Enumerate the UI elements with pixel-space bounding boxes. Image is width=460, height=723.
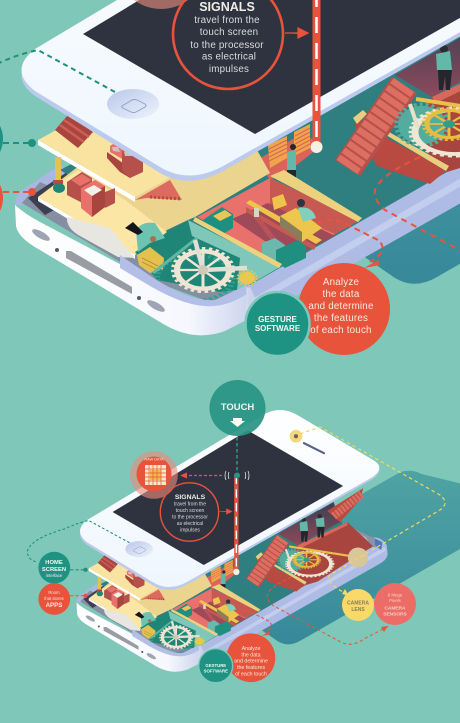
upper gesture text: SOFTWARE [255, 324, 301, 333]
yellow crate [137, 247, 164, 273]
home screen label: HOME [45, 560, 63, 566]
raw data arrow [180, 472, 222, 478]
foreground gear [153, 238, 247, 301]
camera lens arrow [342, 589, 349, 596]
body front wall [15, 205, 262, 335]
dark gear housing [135, 220, 240, 292]
small stairs [135, 180, 182, 200]
red room [197, 170, 362, 265]
apps label: that stores [44, 596, 64, 601]
home screen circle [0, 109, 3, 169]
analyze label: the features [237, 665, 265, 671]
camera sensors label: Pixels [389, 598, 402, 603]
analyze label: and determine [234, 658, 268, 664]
machine [254, 208, 306, 268]
apps circle [0, 168, 3, 228]
phone top thickness [22, 0, 460, 181]
dark cavity corner [28, 170, 90, 215]
home screen label: SCREEN [42, 567, 66, 573]
apps connector [3, 188, 36, 196]
teal gear [396, 104, 448, 146]
raw data halo [116, 0, 206, 9]
touch dashes [236, 437, 238, 472]
gesture circle [246, 292, 310, 356]
upper signals description: to the processor [190, 40, 264, 51]
camera sensors circle [374, 583, 416, 625]
rim highlight [250, 100, 460, 301]
gold support pole [53, 157, 65, 193]
lower signals description: travel from the [174, 502, 206, 508]
yellow bar [416, 99, 460, 119]
raw data panel [136, 456, 172, 492]
right speaker [146, 298, 166, 314]
raw data pixel grid [145, 465, 166, 485]
analyze label: the data [241, 652, 261, 658]
home screen label: interface [46, 573, 63, 578]
right screw [137, 296, 141, 300]
mechanic [125, 222, 165, 252]
gesture label: GESTURE [205, 663, 226, 668]
yellow camera link [300, 427, 445, 593]
upper signals description: impulses [209, 64, 249, 75]
camera sensors label: 8 Mega [388, 592, 403, 598]
main staircase [335, 77, 417, 176]
upper analyze text: the features [314, 313, 368, 324]
lower signals text: SIGNALS [175, 494, 206, 501]
touch label: TOUCH [221, 402, 254, 413]
room edge [193, 217, 282, 268]
lower signals description: to the processor [172, 514, 208, 520]
camera lens label: LENS [351, 607, 365, 613]
upper cabinets [107, 142, 143, 178]
lower yellow floor [38, 170, 167, 259]
touch arrow [230, 418, 245, 427]
dock connector [66, 251, 132, 294]
cream gear [411, 108, 460, 156]
left speaker [31, 227, 51, 243]
vibration waves [225, 471, 249, 480]
upper analyze text: and determine [308, 301, 374, 312]
yellow gear [423, 108, 460, 140]
red platform [353, 110, 449, 184]
upper signals text: SIGNALS [199, 0, 255, 14]
analysis link [317, 220, 382, 262]
analysis arrow [364, 260, 380, 268]
analyze label: of each touch [235, 672, 267, 678]
signal pole [310, 0, 322, 153]
upper gesture text: GESTURE [258, 315, 298, 324]
red stairs on upper floor [55, 115, 93, 148]
touch circle [210, 380, 266, 436]
arrow to pole [285, 28, 308, 38]
upper signals description: touch screen [200, 27, 258, 38]
main yellow floor [38, 150, 270, 255]
room ledge [432, 53, 460, 103]
raw data label: RAW DATA [144, 458, 164, 462]
lower cabinets [67, 172, 115, 217]
upper analyze text: of each touch [310, 325, 372, 336]
lower phone illustration [27, 410, 460, 683]
battery [67, 217, 135, 258]
apps label: APPS [46, 602, 62, 609]
body side rim [238, 82, 460, 324]
seated worker [297, 199, 316, 222]
camera sensor link [375, 157, 460, 284]
upper yellow floor [38, 118, 180, 202]
camera sensors label: SENSORS [383, 612, 408, 618]
phone white face [22, 0, 460, 176]
camera lens label: CAMERA [347, 600, 369, 606]
upper analyze text: the data [322, 289, 360, 300]
lower signals description: impulses [180, 528, 200, 534]
left screw [55, 248, 59, 252]
phone shadow [340, 0, 460, 284]
camera sensors label: CAMERA [384, 606, 406, 612]
gear room floor [155, 220, 280, 292]
gesture label: SOFTWARE [204, 668, 228, 674]
camera lens circle [342, 589, 374, 621]
analyze label: Analyze [242, 646, 260, 652]
back room wall [395, 15, 460, 97]
apps label: Room [48, 590, 60, 595]
worker [287, 144, 296, 180]
sensor dot [234, 472, 240, 478]
rim seam [246, 287, 248, 318]
upper phone illustration [0, 0, 460, 356]
gear arm [410, 104, 418, 128]
home button [107, 89, 159, 119]
upper analyze text: Analyze [323, 277, 359, 288]
upper signals description: as electrical [202, 52, 256, 62]
front lavender edge [120, 255, 247, 306]
teal crates [203, 207, 233, 238]
person [436, 45, 452, 90]
lower signals description: touch screen [176, 508, 205, 514]
home screen link [0, 50, 115, 128]
upper signals description: travel from the [194, 15, 260, 26]
screen [83, 0, 460, 134]
desk with yellow boxes [246, 194, 322, 250]
analyze circle [298, 263, 390, 355]
back left rim [15, 165, 70, 205]
centre wall with striped panels [257, 124, 316, 180]
interior cavity [22, 182, 250, 304]
small gold gear [238, 270, 256, 286]
back red floor [405, 53, 460, 172]
camera sensors arrow [381, 626, 388, 632]
home screen connector [3, 139, 36, 147]
lower signals description: as electrical [177, 521, 203, 527]
signals ring [173, 0, 283, 89]
interior floor [60, 0, 460, 285]
